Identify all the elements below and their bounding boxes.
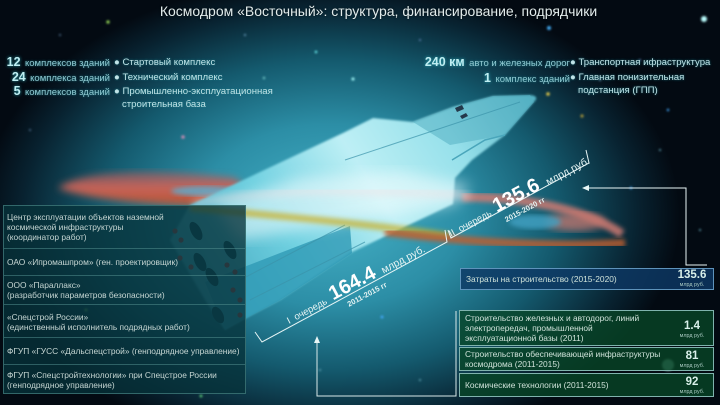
contractor 4: «Спецстрой России» <box>7 312 88 322</box>
cost panel: cosmodrome infrastructure <box>459 347 714 371</box>
cost panel: space technology <box>459 373 714 397</box>
cost panel: space technology: 92 <box>686 376 698 388</box>
contractor 1: космической инфраструктуры <box>7 222 123 232</box>
left infrastructure list: строительная база <box>122 99 206 110</box>
rocket <box>170 95 536 330</box>
contractor 5 <box>4 337 245 364</box>
cost panel: cosmodrome infrastructure: космодрома (2011-2015) <box>465 359 560 369</box>
stage II label <box>443 148 598 250</box>
cost panel: roads and power lines: эксплуатационной базы (2011) <box>465 333 584 343</box>
cost panel: construction 2015-2020: Затраты на строительство (2015-2020) <box>466 274 617 284</box>
contractor 1: (координатор работ) <box>7 232 87 242</box>
right infrastructure list: 240 км авто и железных дорог <box>425 55 570 69</box>
front arc of ring <box>190 208 625 245</box>
stage I label: I очередь <box>285 296 329 327</box>
right infrastructure list: ● Транспортная ифраструктура <box>570 57 710 68</box>
cost panel: roads and power lines: Строительство железных и автодорог, линий <box>465 313 639 323</box>
contractor 3: ООО «Параллакс» <box>7 280 81 290</box>
cost panel: roads and power lines: 1.4 <box>684 320 700 332</box>
cost panel: roads and power lines: электропередач, промышленной <box>465 323 593 333</box>
contractor 2: ОАО «Ипромашпром» (ген. проектировщик) <box>7 257 178 267</box>
contractor 2 <box>4 248 245 275</box>
left infrastructure list: ● Технический комплекс <box>114 72 223 83</box>
stage I label: 2011-2015 гг <box>346 280 389 309</box>
contractor 4: (единственный исполнитель подрядных работ) <box>7 322 190 332</box>
title: Космодром «Восточный»: структура, финансирование, подрядчики <box>160 3 597 19</box>
left infrastructure list: ● Стартовый комплекс <box>114 57 215 68</box>
contractor 3: (разработчик параметров безопасности) <box>7 290 165 300</box>
stage II label: 2015-2020 гг <box>503 195 547 224</box>
arrow to stage II <box>582 185 707 265</box>
cost panel: construction 2015-2020 <box>460 268 714 290</box>
left infrastructure list: 12 комплексов зданий <box>7 55 110 69</box>
right infrastructure list: подстанция (ГПП) <box>578 85 658 96</box>
ring left lobe <box>58 172 262 206</box>
stage II label: II очередь <box>447 208 494 240</box>
contractor 6: (генподрядное управление) <box>7 380 115 390</box>
stage I label: 164.4 <box>325 262 380 305</box>
cost panel: construction 2015-2020: млрд руб. <box>680 282 704 288</box>
cost panel: cosmodrome infrastructure: 81 <box>686 350 698 362</box>
right infrastructure list <box>424 55 711 96</box>
stage I label <box>281 236 433 337</box>
left infrastructure list <box>6 54 273 110</box>
stage II label: 135.6 <box>489 174 543 217</box>
left infrastructure list: 24 комплекса зданий <box>12 70 110 84</box>
left infrastructure list: ● Промышленно-эксплуатационная <box>114 86 273 97</box>
stage II label: млрд руб. <box>544 155 592 188</box>
right infrastructure list: 1 комплекс зданий <box>484 71 570 85</box>
contractor 6: ФГУП «Спецстройтехнологии» при Спецстрое России <box>7 370 217 380</box>
contractor 4 <box>4 304 245 337</box>
rocket engines <box>187 220 239 325</box>
contractor 5: ФГУП «ГУСС «Дальспецстрой» (генподрядное управление) <box>7 346 240 356</box>
right infrastructure list: ● Главная понизительная <box>570 72 684 83</box>
contractor 6 <box>4 364 245 393</box>
panel: contractors <box>3 205 246 394</box>
cost panel: cosmodrome infrastructure: Строительство обеспечивающей инфраструктуры <box>465 349 660 359</box>
contractor 1 <box>7 212 164 242</box>
stage brackets <box>255 150 589 342</box>
left infrastructure list: 5 комплексов зданий <box>14 84 110 98</box>
cost panel: space technology: Космические технологии (2011-2015) <box>465 380 609 390</box>
cost panel: space technology: млрд руб. <box>680 389 704 395</box>
cost panel: roads and power lines: млрд руб. <box>680 333 704 339</box>
contractor 1: Центр эксплуатации объектов наземной <box>7 212 164 222</box>
contractor 3 <box>4 275 245 304</box>
stage I label: млрд руб. <box>379 243 427 276</box>
arrow to stage I <box>314 311 456 396</box>
cost panel: construction 2015-2020: 135.6 <box>678 269 706 281</box>
ring right lobe <box>462 197 622 234</box>
cost panel: cosmodrome infrastructure: млрд руб. <box>680 363 704 369</box>
cost panel: roads and power lines <box>459 310 714 346</box>
